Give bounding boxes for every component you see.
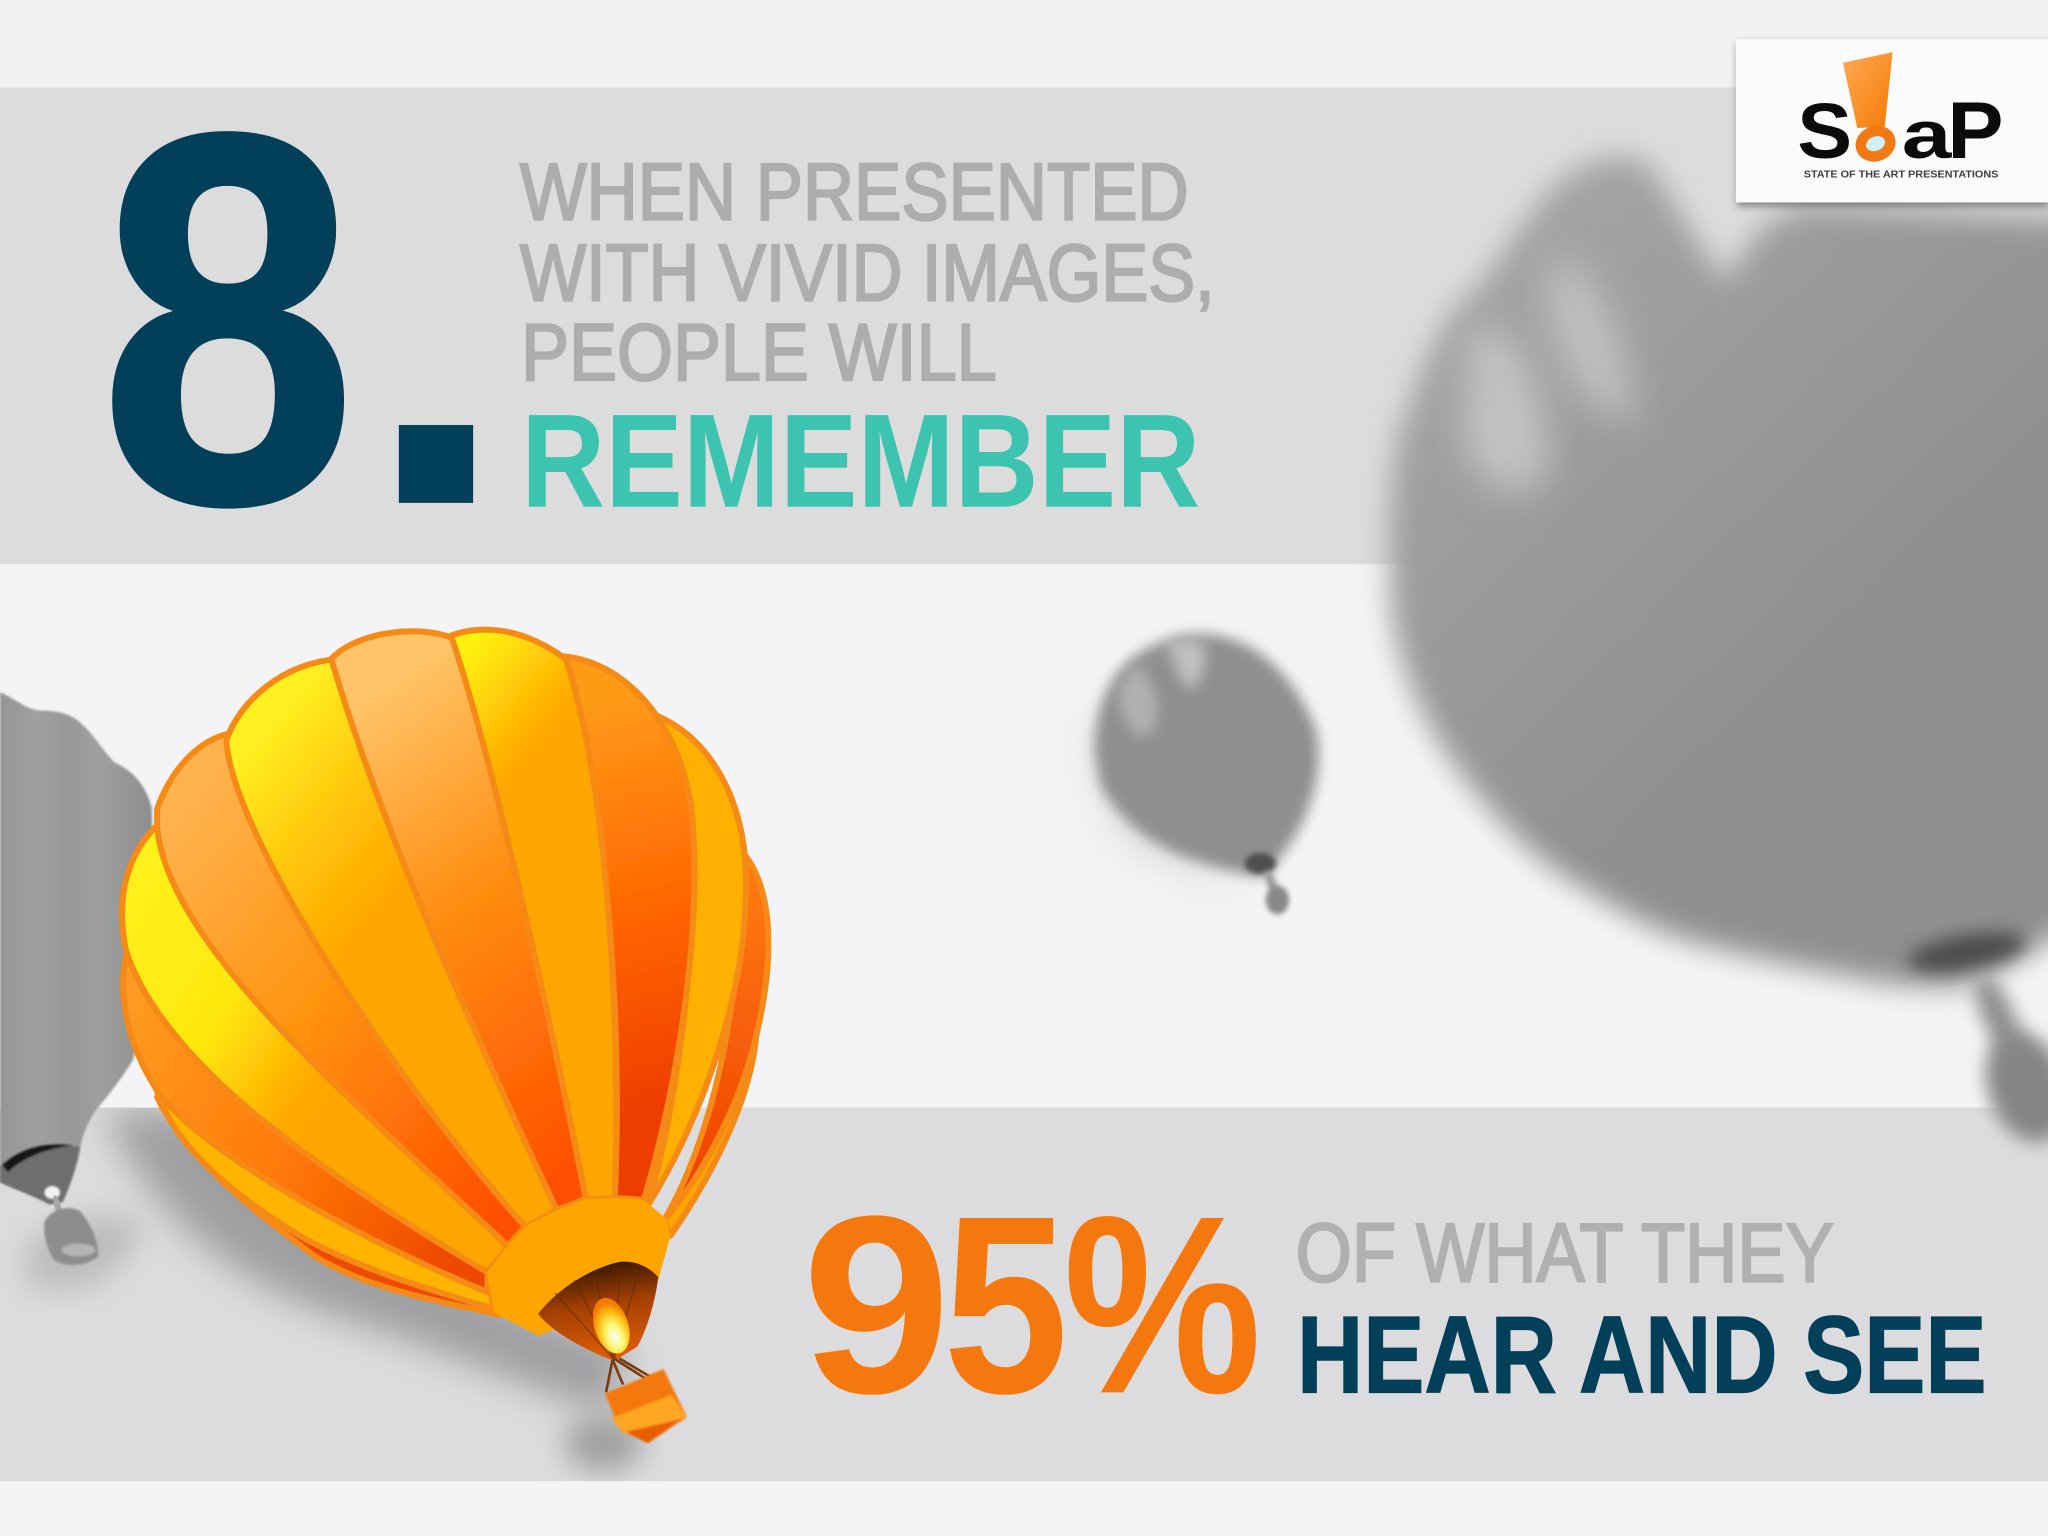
grey lead-in: WHEN PRESENTED — [520, 147, 1189, 237]
heading number: 8 — [99, 24, 357, 614]
balloon envelope — [122, 630, 768, 1336]
exclamation bar — [1843, 52, 1893, 128]
headline text — [520, 147, 1215, 536]
logo mark — [1797, 52, 2004, 181]
shadow under main balloon — [104, 1110, 643, 1472]
grey lead-in: PEOPLE WILL — [521, 308, 997, 398]
statistic caption — [1296, 1205, 1987, 1416]
burner mouth — [538, 1262, 658, 1361]
statistic 95%: 5 — [943, 1163, 1068, 1446]
statistic 95%: % — [1063, 1163, 1262, 1446]
blurred grey balloon: large right — [1390, 156, 2048, 1154]
tagline: STATE OF THE ART PRESENTATIONS — [1804, 170, 1998, 181]
orange hot air balloon — [122, 630, 768, 1443]
ring — [1857, 127, 1894, 160]
logo card — [1736, 39, 2048, 202]
bottom band — [0, 1108, 2048, 1481]
grey lead-in: WITH VIVID IMAGES, — [520, 228, 1215, 318]
blurred grey balloon: small centre — [1084, 634, 1319, 914]
top strip — [0, 0, 2048, 88]
grey lead-in — [520, 147, 1215, 398]
basket — [605, 1369, 687, 1443]
top band — [0, 88, 2048, 564]
ropes — [606, 1358, 664, 1392]
logo mark: a — [1902, 98, 1953, 173]
statistic 95%: 9 — [802, 1163, 951, 1446]
statistic 95% — [802, 1163, 1262, 1446]
flame — [586, 1293, 636, 1358]
teal keyword: REMEMBER — [521, 387, 1200, 536]
grey balloon: left edge — [0, 692, 152, 1291]
heading number: . — [363, 30, 509, 614]
card — [1736, 39, 2048, 202]
letters: S — [1797, 86, 1852, 174]
logo mark: P — [1947, 86, 2004, 176]
grey line: OF WHAT THEY — [1296, 1205, 1834, 1299]
